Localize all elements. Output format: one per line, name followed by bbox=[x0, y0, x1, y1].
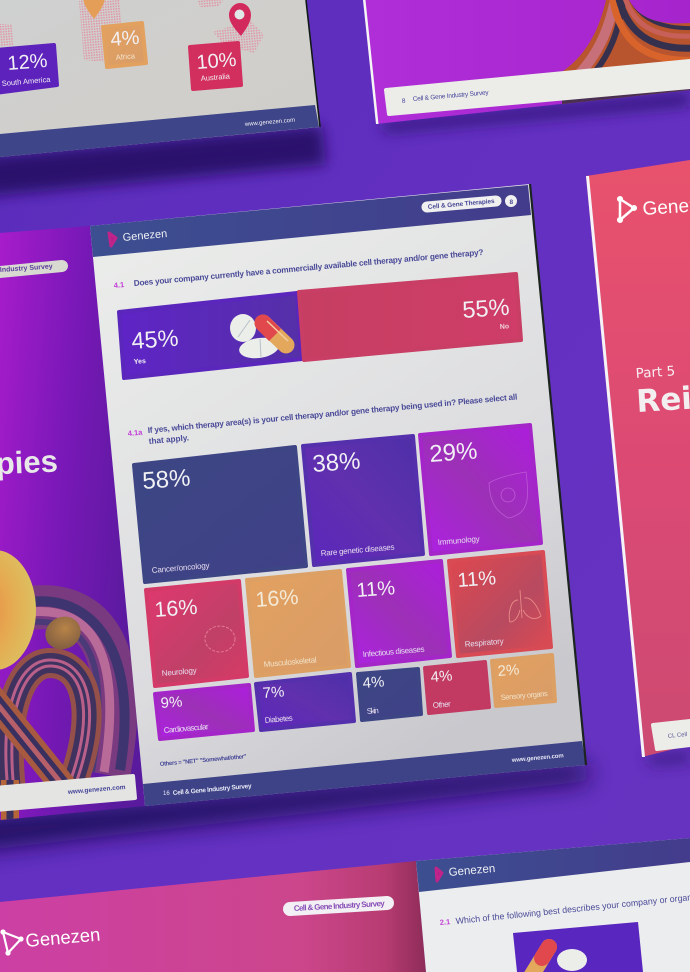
cell: immunology 29%: 29% bbox=[428, 437, 478, 468]
cell: sensory organs 2% bbox=[492, 655, 555, 706]
footer band bbox=[143, 741, 586, 806]
stacked bar: yes / no bbox=[119, 274, 521, 378]
footer url: www.genezen.com bbox=[67, 784, 126, 796]
logo wordmark: Genezen bbox=[25, 924, 101, 951]
section pill bbox=[290, 903, 387, 909]
stacked bar: yes / no: 55% bbox=[461, 294, 510, 323]
cell: rare genetic diseases 38%: Rare genetic diseases bbox=[320, 543, 395, 558]
page number bbox=[505, 195, 517, 207]
card: South America 12% bbox=[0, 45, 57, 93]
cell: infectious diseases 11% bbox=[348, 561, 450, 666]
panel: top-left map page bbox=[0, 0, 320, 157]
cell: musculoskeletal 16% bbox=[247, 571, 349, 676]
footer url: www.genezen.com bbox=[244, 118, 295, 128]
map pin: red bbox=[229, 3, 251, 36]
cell: rare genetic diseases 38%: 38% bbox=[311, 447, 361, 478]
cell: respiratory 11%: Respiratory bbox=[464, 637, 504, 649]
logo icon bbox=[2, 930, 22, 954]
question 4.1 text: Does your company currently have a commercially available cell therapy and/or gene therapy? bbox=[133, 248, 484, 288]
cell: cardiovascular 9% bbox=[155, 685, 253, 739]
stacked bar: yes / no: No bbox=[500, 323, 509, 331]
cell: neurology 16% bbox=[146, 581, 247, 686]
card: Australia 10%: 10% bbox=[196, 49, 238, 74]
icon: pills bbox=[230, 314, 288, 361]
cell: sensory organs 2%: 2% bbox=[497, 661, 520, 680]
logo icon bbox=[618, 197, 636, 222]
artwork: striped arches and spheres bbox=[0, 550, 125, 830]
panel: bottom-left page bbox=[0, 861, 426, 972]
page edge bbox=[530, 184, 586, 765]
card: Australia 10%: Australia bbox=[200, 71, 231, 83]
footer text: CL Cell bbox=[668, 732, 688, 740]
logo bbox=[109, 228, 168, 246]
card: South America 12%: South America bbox=[1, 75, 52, 88]
part label: Part 5 bbox=[635, 363, 676, 382]
card: South America 12%: 12% bbox=[7, 50, 49, 75]
cell: sensory organs 2%: Sensory organs bbox=[500, 689, 548, 702]
sphere: gold cell bbox=[0, 550, 36, 670]
cell: musculoskeletal 16%: Musculoskeletal bbox=[263, 655, 317, 669]
card: Africa 4% bbox=[103, 23, 146, 67]
cell: skin 4%: 4% bbox=[362, 673, 385, 692]
cell: other 4%: Other bbox=[432, 699, 451, 710]
cell: immunology 29% bbox=[420, 425, 541, 554]
footer bar bbox=[0, 776, 135, 810]
cell: immunology 29%: Immunology bbox=[437, 534, 480, 547]
footer bar bbox=[653, 721, 690, 749]
card: Africa 4%: 4% bbox=[110, 27, 140, 51]
card: Africa 4%: Africa bbox=[115, 51, 136, 62]
panel: right Part 5 page bbox=[586, 160, 690, 757]
section pill bbox=[0, 266, 62, 273]
cell: infectious diseases 11%: 11% bbox=[356, 577, 396, 602]
question 4.1 number: 4.1 bbox=[113, 280, 125, 290]
cell: cardiovascular 9%: Cardiovascular bbox=[163, 722, 209, 735]
footer band bbox=[0, 105, 319, 157]
footer page label: Cell & Gene Industry Survey bbox=[173, 783, 252, 797]
shadows under pages bbox=[0, 92, 690, 852]
pill text: Cell & Gene Industry Survey bbox=[294, 899, 386, 913]
panel: bottom-right page bbox=[416, 838, 690, 972]
cell: neurology 16%: 16% bbox=[154, 595, 198, 622]
treemap chart bbox=[134, 425, 555, 739]
cell: infectious diseases 11%: Infectious diseases bbox=[362, 645, 425, 659]
logo: Genezen bbox=[122, 228, 168, 244]
cell: skin 4%: Skin bbox=[366, 706, 379, 716]
icon: shield bbox=[489, 472, 528, 518]
footnote: Others = "NET" "Somewhat/other" bbox=[160, 754, 247, 768]
logo: Genezen bbox=[448, 863, 496, 879]
cell: cardiovascular 9%: 9% bbox=[160, 693, 183, 712]
footer url: www.genezen.com bbox=[511, 753, 564, 764]
footer bar bbox=[386, 61, 690, 114]
cell: cancer/oncology 58%: Cancer/oncology bbox=[151, 561, 210, 575]
cell: rare genetic diseases 38% bbox=[303, 436, 423, 565]
page number: 8 bbox=[510, 199, 514, 206]
icon: brain bbox=[205, 626, 235, 652]
card with pill icon bbox=[513, 922, 643, 972]
icon: lungs bbox=[509, 590, 541, 622]
pill text: Industry Survey bbox=[0, 263, 53, 274]
footer page label: 16 bbox=[163, 791, 170, 797]
cell: respiratory 11%: 11% bbox=[457, 567, 497, 592]
cell: neurology 16%: Neurology bbox=[161, 666, 197, 678]
cell: other 4%: 4% bbox=[430, 667, 453, 686]
dotted world map bbox=[0, 0, 264, 62]
sphere: brown bbox=[45, 616, 81, 650]
question number: 2.1 bbox=[439, 917, 451, 927]
panel: left chapter page bbox=[0, 226, 145, 830]
panel: main survey page bbox=[90, 184, 586, 806]
question 4.1a text: If yes, which therapy area(s) is your cell therapy and/or gene therapy being used in? Please select all bbox=[147, 392, 518, 435]
stacked bar: yes / no: 45% bbox=[130, 325, 179, 354]
cell: diabetes 7%: Diabetes bbox=[264, 714, 293, 725]
question 4.1a text: that apply. bbox=[148, 433, 189, 446]
panel: top-right magenta page bbox=[363, 0, 690, 124]
card: Australia 10% bbox=[190, 43, 241, 89]
header band bbox=[416, 838, 690, 892]
question 4.1a number: 4.1a bbox=[127, 428, 144, 438]
cell: cancer/oncology 58%: 58% bbox=[141, 464, 191, 495]
section pill: Cell & Gene Therapies bbox=[428, 198, 495, 211]
cell: musculoskeletal 16%: 16% bbox=[255, 585, 299, 612]
cell: other 4% bbox=[425, 662, 489, 713]
map pin: orange bbox=[83, 0, 105, 19]
cell: respiratory 11% bbox=[449, 552, 551, 656]
footer text: 8 bbox=[402, 98, 406, 105]
header band bbox=[90, 185, 531, 257]
striped artwork bbox=[560, 0, 690, 110]
cell: cancer/oncology 58% bbox=[134, 447, 306, 582]
cell: diabetes 7%: 7% bbox=[262, 683, 285, 702]
stacked bar: yes / no: Yes bbox=[134, 358, 146, 366]
cell: skin 4% bbox=[358, 669, 421, 720]
cell: diabetes 7% bbox=[256, 674, 354, 730]
panel: top-right magenta page: Cell & Gene Industry Survey bbox=[413, 89, 490, 103]
